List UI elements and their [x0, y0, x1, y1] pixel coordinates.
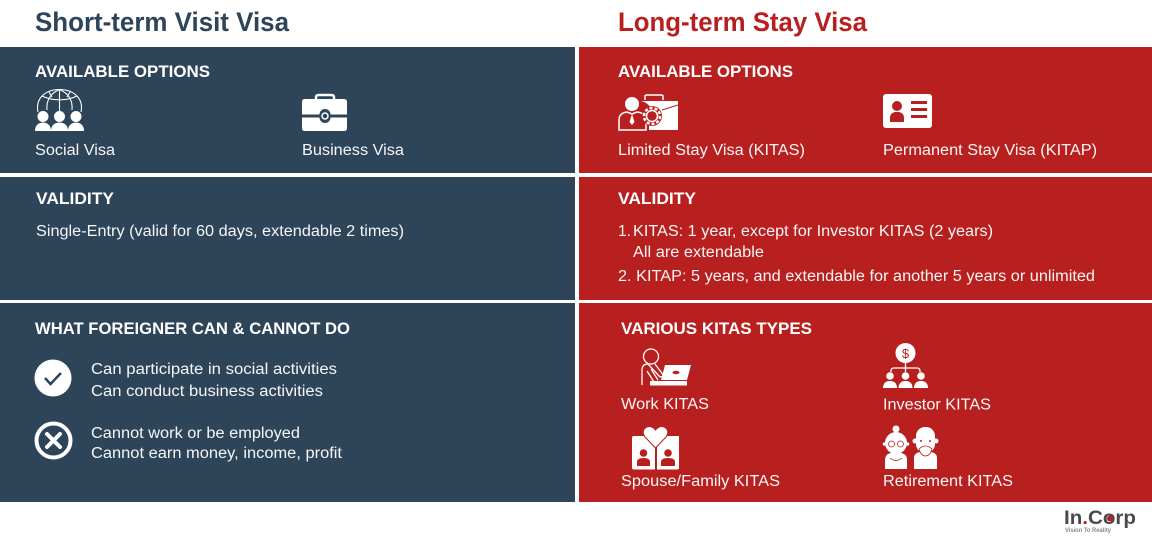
- text: cannot do: Cannot work or be employed: [91, 425, 300, 442]
- panel: long-term available options: [579, 47, 1152, 173]
- heading: available options: AVAILABLE OPTIONS: [618, 62, 793, 81]
- text: can do: Can participate in social activities: [91, 361, 337, 378]
- icon: check: [34, 360, 72, 396]
- heading: available options: AVAILABLE OPTIONS: [35, 62, 210, 81]
- title: short-term visit visa: Short-term Visit Visa: [35, 7, 290, 37]
- icon: spouse and family: [632, 426, 679, 470]
- logo: InCorp: In.Corp: [1064, 508, 1136, 529]
- label: limited stay visa: Limited Stay Visa (KITAS): [618, 142, 805, 159]
- label: social visa: Social Visa: [35, 142, 115, 159]
- text: validity list: [618, 223, 1095, 285]
- text: single entry: Single-Entry (valid for 60 days, extendable 2 times): [36, 223, 404, 240]
- panel: various kitas types: [579, 303, 1152, 502]
- icon: retired couple: [883, 426, 938, 469]
- title: long-term stay visa: Long-term Stay Visa: [618, 7, 868, 37]
- label: permanent stay visa: Permanent Stay Visa (KITAP): [883, 142, 1097, 159]
- panel: short-term available options: [0, 47, 575, 173]
- panel: what foreigner can and cannot do: [0, 303, 575, 502]
- heading: what foreigner can and cannot do: WHAT FOREIGNER CAN & CANNOT DO: [35, 319, 350, 338]
- panel: short-term validity: [0, 177, 575, 300]
- label: retirement kitas: Retirement KITAS: [883, 473, 1013, 490]
- icon: cross: [36, 424, 70, 458]
- label: investor kitas: Investor KITAS: [883, 396, 991, 414]
- icon: globe with people: [35, 90, 84, 131]
- icon: briefcase: [302, 95, 347, 131]
- text: cannot do: Cannot earn money, income, profit: [91, 445, 343, 462]
- label: business visa: Business Visa: [302, 142, 404, 159]
- label: spouse family kitas: Spouse/Family KITAS: [621, 473, 780, 490]
- panel: long-term validity: [579, 177, 1152, 300]
- text: validity list: All are extendable: [633, 244, 764, 261]
- heading: validity: VALIDITY: [36, 189, 115, 208]
- heading: various kitas types: VARIOUS KITAS TYPES: [621, 319, 812, 338]
- text: can do: Can conduct business activities: [91, 383, 323, 400]
- text: can do: [91, 361, 337, 400]
- heading: validity: VALIDITY: [618, 189, 697, 208]
- icon: id card: [883, 94, 932, 128]
- text: validity list: 2. KITAP: 5 years, and extendable for another 5 years or unlimited: [618, 268, 1095, 285]
- icon: worker at laptop: [642, 349, 691, 386]
- icon: investor hierarchy: $: [902, 346, 910, 361]
- icon: investor hierarchy: [883, 343, 928, 388]
- text: validity list: 1.: [618, 223, 631, 240]
- icon: employee with briefcase and gear: [619, 95, 678, 130]
- text: validity list: KITAS: 1 year, except for Investor KITAS (2 years): [633, 223, 993, 240]
- label: work kitas: Work KITAS: [621, 396, 709, 413]
- tagline: Vision To Reality: [1065, 528, 1112, 534]
- text: cannot do: [91, 425, 343, 462]
